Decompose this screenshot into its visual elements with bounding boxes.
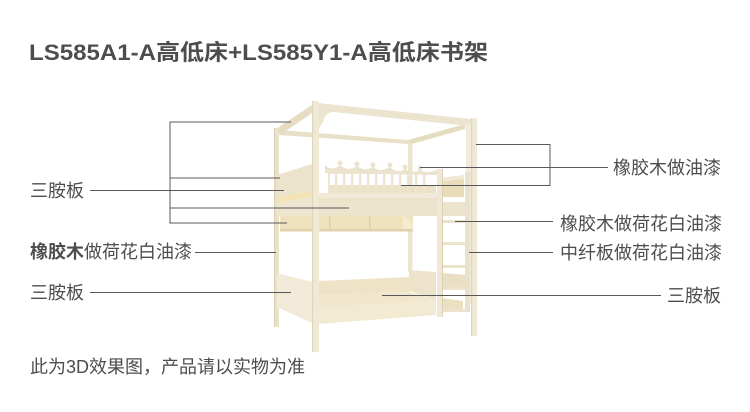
left bracket leader lines xyxy=(170,122,349,223)
right bracket label: rubberwood oil paint xyxy=(401,144,721,186)
lower bed back panel xyxy=(319,277,409,295)
upper deck rail xyxy=(319,193,437,198)
ladder back rail xyxy=(465,172,470,312)
back right post xyxy=(466,124,471,304)
left label: rubberwood: 橡胶木做荷花白油漆 xyxy=(30,241,192,262)
guard rail mattress backing xyxy=(329,185,436,197)
bookshelf xyxy=(280,216,413,230)
lower bed mattress deck xyxy=(319,292,436,308)
bunk bed illustration xyxy=(274,101,477,352)
ladder rungs xyxy=(443,220,467,312)
left top rail xyxy=(276,105,312,135)
right label: rubberwood lotus white paint: 橡胶木做荷花白油漆 xyxy=(560,214,722,234)
back middle post xyxy=(408,140,412,272)
right bracket label: rubberwood oil paint: 橡胶木做油漆 xyxy=(613,158,721,178)
front left post xyxy=(312,101,319,352)
back rail xyxy=(279,130,408,144)
left label: upper melamine board: 三胺板 xyxy=(30,181,84,201)
front right post xyxy=(471,118,477,336)
right label: MDF lotus white paint: 中纤板做荷花白油漆 xyxy=(560,243,722,263)
right label: melamine board: 三胺板 xyxy=(667,286,721,306)
guard rail crown xyxy=(325,160,437,175)
right top rail xyxy=(408,124,465,144)
title: LS585A1-A高低床+LS585Y1-A高低床书架 xyxy=(29,40,488,65)
footnote: 此为3D效果图，产品请以实物为准 xyxy=(30,357,305,377)
upper headboard panel xyxy=(277,164,312,197)
back left post xyxy=(274,128,279,327)
left label: lower melamine board: 三胺板 xyxy=(30,283,84,303)
guard rail balusters xyxy=(328,172,436,197)
upper right end panel xyxy=(442,175,464,197)
front top rail with arch xyxy=(318,103,471,136)
lower headboard panel xyxy=(277,273,312,323)
ladder side rail xyxy=(437,169,442,317)
